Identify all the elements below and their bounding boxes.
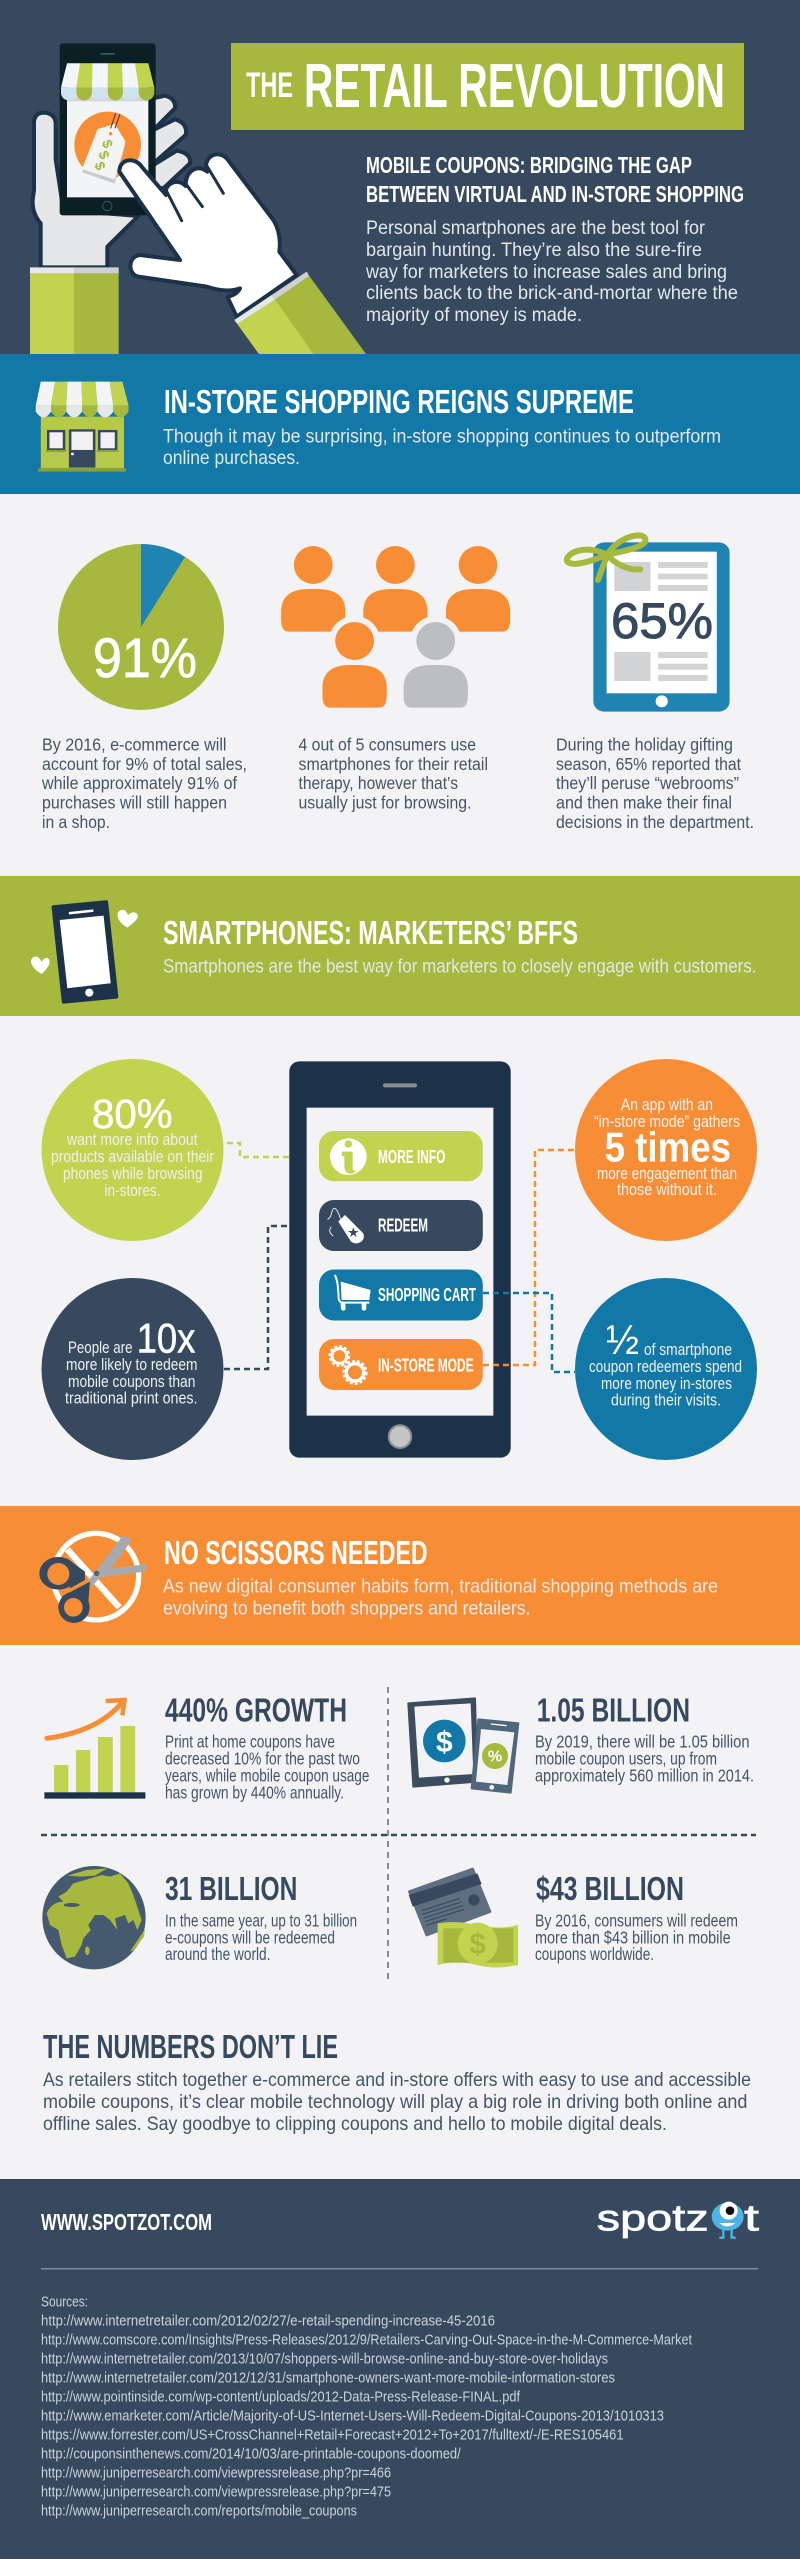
subheading text (163, 1576, 718, 1619)
icon: tablet and phone: $ (436, 1726, 453, 1759)
circle: 10x more likely: more likely to redeem (66, 1356, 198, 1374)
conclusion paragraph: mobile coupons, it’s clear mobile technology will play a big role in driving both online and (43, 2091, 747, 2113)
circle: 80% more info: want more info about (66, 1131, 198, 1149)
circle: 80% more info: phones while browsing (63, 1165, 202, 1183)
dashed connector: more info (227, 1143, 319, 1157)
circle: half of redeemers: coupon redeemers spend (589, 1358, 742, 1376)
stat: 440% growth: years, while mobile coupon usage (165, 1765, 369, 1785)
sources list: http://www.internetretailer.com/2013/10/07/shoppers-will-browse-online-and-buy-store-over-holidays (41, 2351, 608, 2368)
icon: five people (281, 546, 510, 708)
pie chart: 91% (58, 544, 224, 710)
button: in-store mode: IN-STORE MODE (378, 1356, 474, 1376)
circle: 80% more info: 80% (92, 1091, 172, 1137)
panel: footer (0, 2179, 800, 2559)
icon: tag (327, 1208, 364, 1243)
icon: gift tablet 65%: 65% (611, 593, 713, 649)
dashed connector: shopping cart (483, 1293, 575, 1372)
icon: gift tablet 65% (567, 535, 730, 712)
stat: 31 billion: In the same year, up to 31 billion (165, 1911, 357, 1931)
panel: coupon stats grid (41, 1687, 756, 1982)
text: tablet caption (556, 735, 754, 832)
icon: info (330, 1138, 367, 1175)
text: people caption: usually just for browsing. (298, 793, 472, 813)
phone body (289, 1061, 511, 1458)
stat: 1.05 billion: approximately 560 million in 2014. (535, 1765, 754, 1785)
website url: WWW.SPOTZOT.COM (41, 2209, 212, 2235)
title banner: THE (246, 66, 293, 105)
text: tablet caption: decisions in the department. (556, 812, 754, 832)
stat: $43 billion (535, 1870, 738, 1964)
circle: 10x more likely: mobile coupons than (68, 1373, 195, 1391)
circle: half of redeemers: during their visits. (611, 1392, 721, 1410)
stat: 31 billion: around the world. (165, 1944, 270, 1964)
panel: in-store stats (41, 535, 754, 832)
icon: cart (335, 1275, 371, 1311)
intro paragraph: clients back to the brick-and-mortar where the (366, 282, 738, 304)
illustration: hands holding smartphone: $ (95, 148, 113, 161)
stat: 1.05 billion: 1.05 BILLION (537, 1692, 690, 1729)
stat: 440% growth (165, 1692, 369, 1802)
panel: in-store shopping band (0, 354, 800, 494)
heading: NO SCISSORS NEEDED (164, 1534, 428, 1571)
conclusion paragraph: offline sales. Say goodbye to clipping coupons and hello to mobile digital deals. (43, 2113, 667, 2135)
stat: 31 billion: e-coupons will be redeemed (165, 1927, 335, 1947)
conclusion paragraph (43, 2069, 751, 2135)
sources list: http://www.juniperresearch.com/viewpressrelease.php?pr=475 (41, 2484, 391, 2501)
button: redeem (319, 1200, 483, 1251)
stat: 440% growth: has grown by 440% annually. (165, 1782, 344, 1802)
circle: 5 times engagement: more engagement than (597, 1165, 737, 1183)
button: shopping cart (319, 1270, 483, 1320)
stat: 440% growth: 440% GROWTH (165, 1692, 347, 1729)
circle: half of redeemers: more money in-stores (601, 1375, 732, 1393)
stat: 31 billion (165, 1870, 357, 1964)
stat: 1.05 billion (535, 1692, 754, 1785)
icon: credit card and cash (409, 1869, 518, 1967)
text: people caption: smartphones for their retail (298, 754, 488, 774)
logo: spotzot: t (744, 2198, 760, 2239)
circle: 80% more info: products available on their (51, 1148, 214, 1166)
sources list: https://www.forrester.com/US+CrossChannel+Retail+Forecast+2012+To+2017/fulltext/-/E-RES105461 (41, 2427, 624, 2444)
illustration: hands holding smartphone: $ (99, 137, 117, 150)
logo: spotzot: spotz (597, 2198, 709, 2239)
circle: half of redeemers (575, 1278, 757, 1460)
text: 91% caption: account for 9% of total sales, (42, 754, 247, 774)
panel: the numbers don't lie (43, 2028, 751, 2135)
stat: 440% growth: Print at home coupons have (165, 1732, 335, 1752)
button: in-store mode (319, 1339, 483, 1390)
text: tablet caption: and then make their final (556, 793, 732, 813)
subheading (366, 152, 744, 207)
sources list: http://www.emarketer.com/Article/Majority-of-US-Internet-Users-Will-Redeem-Digital-Coupons-2013/1010313 (41, 2408, 664, 2425)
intro paragraph: way for marketers to increase sales and bring (365, 261, 727, 283)
icon: tablet and phone (408, 1698, 518, 1793)
heading: SMARTPHONES: MARKETERS’ BFFS (163, 914, 578, 951)
sources list: http://www.comscore.com/Insights/Press-Releases/2012/9/Retailers-Carving-Out-Space-in-the-M-Commerce-Market (41, 2332, 693, 2349)
sources list: Sources: (41, 2294, 88, 2311)
stat: 440% growth: decreased 10% for the past two (165, 1748, 360, 1768)
circle: 10x more likely (42, 1278, 224, 1460)
stat: 1.05 billion: By 2019, there will be 1.05 billion (535, 1732, 750, 1752)
circle: 10x more likely: 10x (137, 1315, 195, 1362)
sources list: http://couponsinthenews.com/2014/10/03/are-printable-coupons-doomed/ (41, 2446, 461, 2463)
icon: smartphone with hearts (31, 902, 138, 1002)
illustration: hands holding smartphone (30, 43, 366, 354)
dashed connector: redeem (224, 1226, 319, 1369)
circle: 5 times engagement: those without it. (617, 1181, 717, 1199)
subheading text: Though it may be surprising, in-store shopping continues to outperform (163, 426, 721, 448)
icon: growth bar chart (44, 1700, 145, 1799)
icon: globe (42, 1866, 146, 1969)
circle: 10x more likely: People are (68, 1339, 132, 1357)
subheading text: evolving to benefit both shoppers and retailers. (163, 1597, 531, 1619)
icon: credit card and cash: $ (470, 1928, 486, 1961)
panel: hero header (0, 0, 800, 354)
text: 91% caption: while approximately 91% of (41, 773, 237, 793)
circle: 80% more info (42, 1059, 224, 1241)
intro paragraph: bargain hunting. They’re also the sure-fire (366, 239, 702, 261)
text: tablet caption: season, 65% reported that (556, 754, 741, 774)
circle: 5 times engagement: 5 times (605, 1123, 731, 1170)
text: 91% caption: purchases will still happen (42, 793, 227, 813)
subheading text (163, 426, 721, 469)
dashed connector: in-store mode (483, 1150, 575, 1365)
circle: half of redeemers: ½ (606, 1316, 639, 1363)
text: people caption: 4 out of 5 consumers use (298, 735, 476, 755)
sources list: http://www.internetretailer.com/2012/02/27/e-retail-spending-increase-45-2016 (41, 2313, 495, 2330)
stat: $43 billion: $43 BILLION (536, 1870, 684, 1907)
icon: storefront (36, 382, 129, 472)
circle: half of redeemers: of smartphone (644, 1341, 732, 1359)
text: tablet caption: During the holiday gifting (556, 735, 733, 755)
heading: IN-STORE SHOPPING REIGNS SUPREME (164, 383, 634, 420)
button: more info: MORE INFO (378, 1147, 445, 1167)
sources list: http://www.internetretailer.com/2012/12/31/smartphone-owners-want-more-mobile-information-stores (41, 2370, 615, 2387)
circle: 10x more likely: traditional print ones. (65, 1390, 198, 1408)
button: redeem: REDEEM (378, 1216, 428, 1236)
stat: 1.05 billion: mobile coupon users, up from (535, 1748, 717, 1768)
text: people caption: therapy, however that’s (298, 773, 458, 793)
text: 91% caption: in a shop. (42, 812, 110, 832)
circle: 80% more info: in-stores. (104, 1182, 160, 1200)
circle: 5 times engagement: An app with an (621, 1096, 713, 1114)
illustration: hands holding smartphone: $ (91, 159, 109, 172)
icon: crossed-out scissors (39, 1533, 147, 1623)
title banner (231, 43, 744, 130)
stat: 31 billion: 31 BILLION (165, 1870, 297, 1907)
stat: $43 billion: more than $43 billion in mobile (535, 1927, 731, 1947)
heading: THE NUMBERS DON’T LIE (43, 2028, 338, 2065)
text: 91% caption: By 2016, e-commerce will (42, 735, 226, 755)
text: people caption (298, 735, 488, 813)
panel: no scissors band (0, 1506, 800, 1645)
button: more info (319, 1131, 483, 1181)
subheading text: online purchases. (163, 447, 300, 469)
button: shopping cart: SHOPPING CART (378, 1285, 476, 1305)
text: 91% caption (41, 735, 247, 832)
intro paragraph (365, 217, 738, 326)
icon: gears (330, 1346, 366, 1384)
sources list (41, 2294, 693, 2520)
circle: 5 times engagement: “in-store mode” gathers (594, 1113, 740, 1131)
pie chart: 91%: 91% (93, 626, 197, 689)
sources list: http://www.juniperresearch.com/reports/mobile_coupons (41, 2503, 357, 2520)
stat: $43 billion: coupons worldwide. (535, 1944, 654, 1964)
sources list: http://www.juniperresearch.com/viewpressrelease.php?pr=466 (41, 2465, 391, 2482)
intro paragraph: Personal smartphones are the best tool for (366, 217, 705, 239)
sources list: http://www.pointinside.com/wp-content/uploads/2012-Data-Press-Release-FINAL.pdf (41, 2389, 521, 2406)
subheading text: As new digital consumer habits form, traditional shopping methods are (163, 1576, 718, 1598)
circle: 5 times engagement (575, 1059, 757, 1241)
intro paragraph: majority of money is made. (366, 304, 582, 326)
text: tablet caption: they’ll peruse “webrooms” (556, 773, 739, 793)
panel: smartphone engagement diagram (42, 1059, 757, 1460)
panel: smartphones band (0, 876, 800, 1016)
stat: $43 billion: By 2016, consumers will redeem (535, 1911, 738, 1931)
logo: spotzot (597, 2198, 760, 2239)
icon: tablet and phone: % (488, 1749, 502, 1766)
